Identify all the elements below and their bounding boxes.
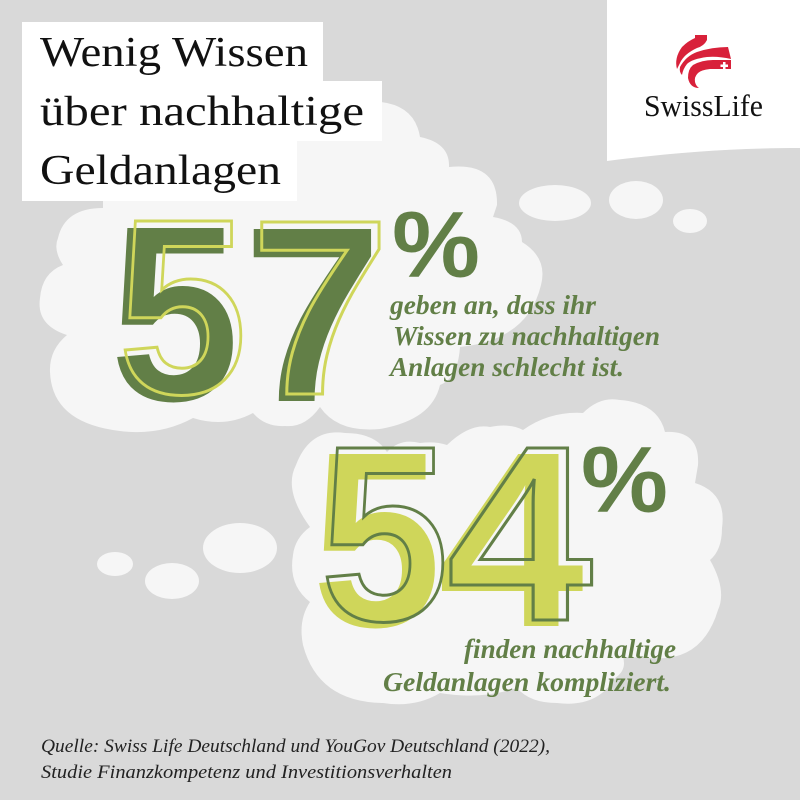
caption: 54: Geldanlagen kompliziert. [383, 667, 671, 697]
big number: 54: 4 [447, 395, 595, 674]
logo wordmark: SwissLife [644, 88, 763, 123]
caption: 54: finden nachhaltige [464, 634, 676, 664]
big number: 54: 5 [320, 394, 449, 674]
thought bubbles: upper [519, 181, 707, 233]
big number: 57: 5 [118, 167, 247, 447]
caption: 57: Wissen zu nachhaltigen [393, 321, 660, 351]
title: über nachhaltige [40, 89, 364, 135]
caption: 54 [383, 634, 676, 697]
thought bubbles: lower [97, 523, 277, 599]
big number: 57 [110, 167, 390, 454]
big number: 57: 5 [110, 174, 239, 454]
source note: Studie Finanzkompetenz und Investitionsverhalten [41, 762, 452, 783]
percent sign: 54: % [581, 427, 668, 532]
big number: 54: 4 [438, 401, 586, 680]
big number: 54 [312, 394, 595, 680]
source note: Quelle: Swiss Life Deutschland und YouGov Deutschland (2022), [41, 736, 550, 757]
big number: 57: 7 [243, 175, 382, 454]
big number: 57: 7 [251, 168, 390, 447]
icon: Swiss Life logo mark [676, 35, 731, 88]
big number: 54: 5 [312, 400, 441, 680]
title: Wenig Wissen [40, 30, 308, 76]
panel: logo corner [607, 0, 800, 161]
title [22, 22, 382, 201]
caption: 57: Anlagen schlecht ist. [388, 352, 624, 382]
caption: 57: geben an, dass ihr [389, 290, 596, 320]
cloud: upper [40, 102, 542, 432]
percent sign: 57: % [392, 192, 480, 297]
caption: 57 [388, 290, 660, 382]
source note [41, 736, 550, 783]
cloud: lower [292, 399, 723, 704]
title: Geldanlagen [40, 148, 281, 194]
